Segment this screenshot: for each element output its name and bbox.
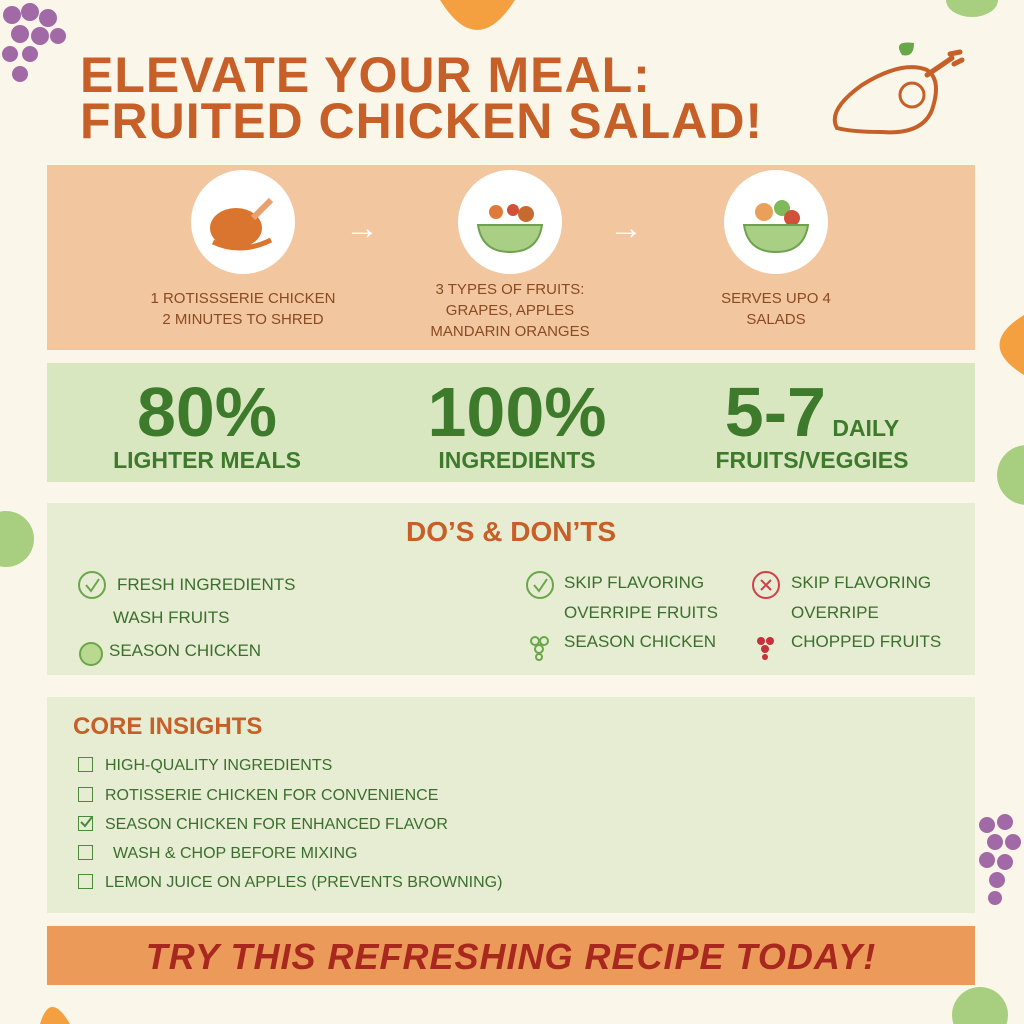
panel: do's and don'ts: CHOPPED FRUITS [791,632,941,651]
arrow: → [609,209,643,247]
icon: check 2 [526,571,554,599]
checklist: SEASON CHICKEN FOR ENHANCED FLAVOR [105,816,448,833]
decoration: apple top right [946,0,998,17]
decoration: orange right [1000,315,1024,375]
checklist [78,757,502,891]
title: FRUITED CHICKEN SALAD! [80,93,763,149]
stat: 5-7: FRUITS/VEGGIES [716,447,908,473]
stat: 80%: LIGHTER MEALS [113,447,301,473]
caption: fruits [430,281,590,340]
icon: check [78,571,106,599]
panel: do's and don'ts: SEASON CHICKEN [564,632,716,651]
caption: fruits: GRAPES, APPLES [446,302,574,319]
decoration: apple right [997,445,1024,505]
icon: chicken drumstick outline [832,42,964,134]
decoration: apple bottom right [952,987,1008,1024]
caption: fruits: 3 TYPES OF FRUITS: [436,281,584,298]
caption: fruits: MANDARIN ORANGES [430,323,590,340]
panel: stats [47,363,975,482]
title: ELEVATE YOUR MEAL: [80,47,651,103]
panel: do's and don'ts: SEASON CHICKEN [109,641,261,660]
caption: serves [721,290,831,328]
checklist: LEMON JUICE ON APPLES (PREVENTS BROWNING) [105,874,502,891]
icon: cross [752,571,780,599]
banner: call to action: TRY THIS REFRESHING RECIPE TODAY! [146,936,876,977]
panel: do's and don'ts: OVERRIPE FRUITS [564,603,718,622]
panel: steps [47,165,975,350]
banner: call to action [47,926,975,985]
title [80,47,763,149]
icon: lime [79,642,103,666]
icon: red berries [757,637,774,660]
caption: chicken [150,290,336,328]
heading: CORE INSIGHTS [73,713,262,740]
panel: do's and don'ts: SKIP FLAVORING [564,573,704,592]
decoration: grapes right [979,814,1021,905]
decoration: orange top [440,0,515,30]
caption: serves: SERVES UPO 4 [721,290,831,307]
checklist: ROTISSERIE CHICKEN FOR CONVENIENCE [105,787,438,804]
panel: do's and don'ts [47,503,975,675]
stat: 5-7: 5-7 DAILY [725,373,899,451]
panel: core insights [47,697,975,913]
caption: chicken: 1 ROTISSSERIE CHICKEN [150,290,336,307]
icon: fruit bowl [458,170,562,274]
icon: chicken [191,170,295,274]
caption: serves: SALADS [746,311,806,328]
panel: do's and don'ts: SKIP FLAVORING [791,573,931,592]
heading: DO’S & DON’TS [406,516,616,547]
caption: chicken: 2 MINUTES TO SHRED [162,311,324,328]
stat: 80%: 80% [137,373,277,451]
checklist: HIGH-QUALITY INGREDIENTS [105,757,332,774]
do items: FRESH INGREDIENTS [117,575,296,594]
stat: 100%: INGREDIENTS [438,447,596,473]
arrow: → [345,209,379,247]
stat: 100%: 100% [427,373,607,451]
stat: 80% [113,373,301,473]
panel: do's and don'ts: OVERRIPE [791,603,879,622]
checklist: WASH & CHOP BEFORE MIXING [113,845,357,862]
icon: salad bowl [724,170,828,274]
decoration: grapes top left [2,3,66,82]
decoration: apple left [0,511,34,567]
decoration: orange bottom left [40,1007,70,1024]
icon: green grapes [530,636,549,661]
panel: do's and don'ts: WASH FRUITS [113,608,229,627]
